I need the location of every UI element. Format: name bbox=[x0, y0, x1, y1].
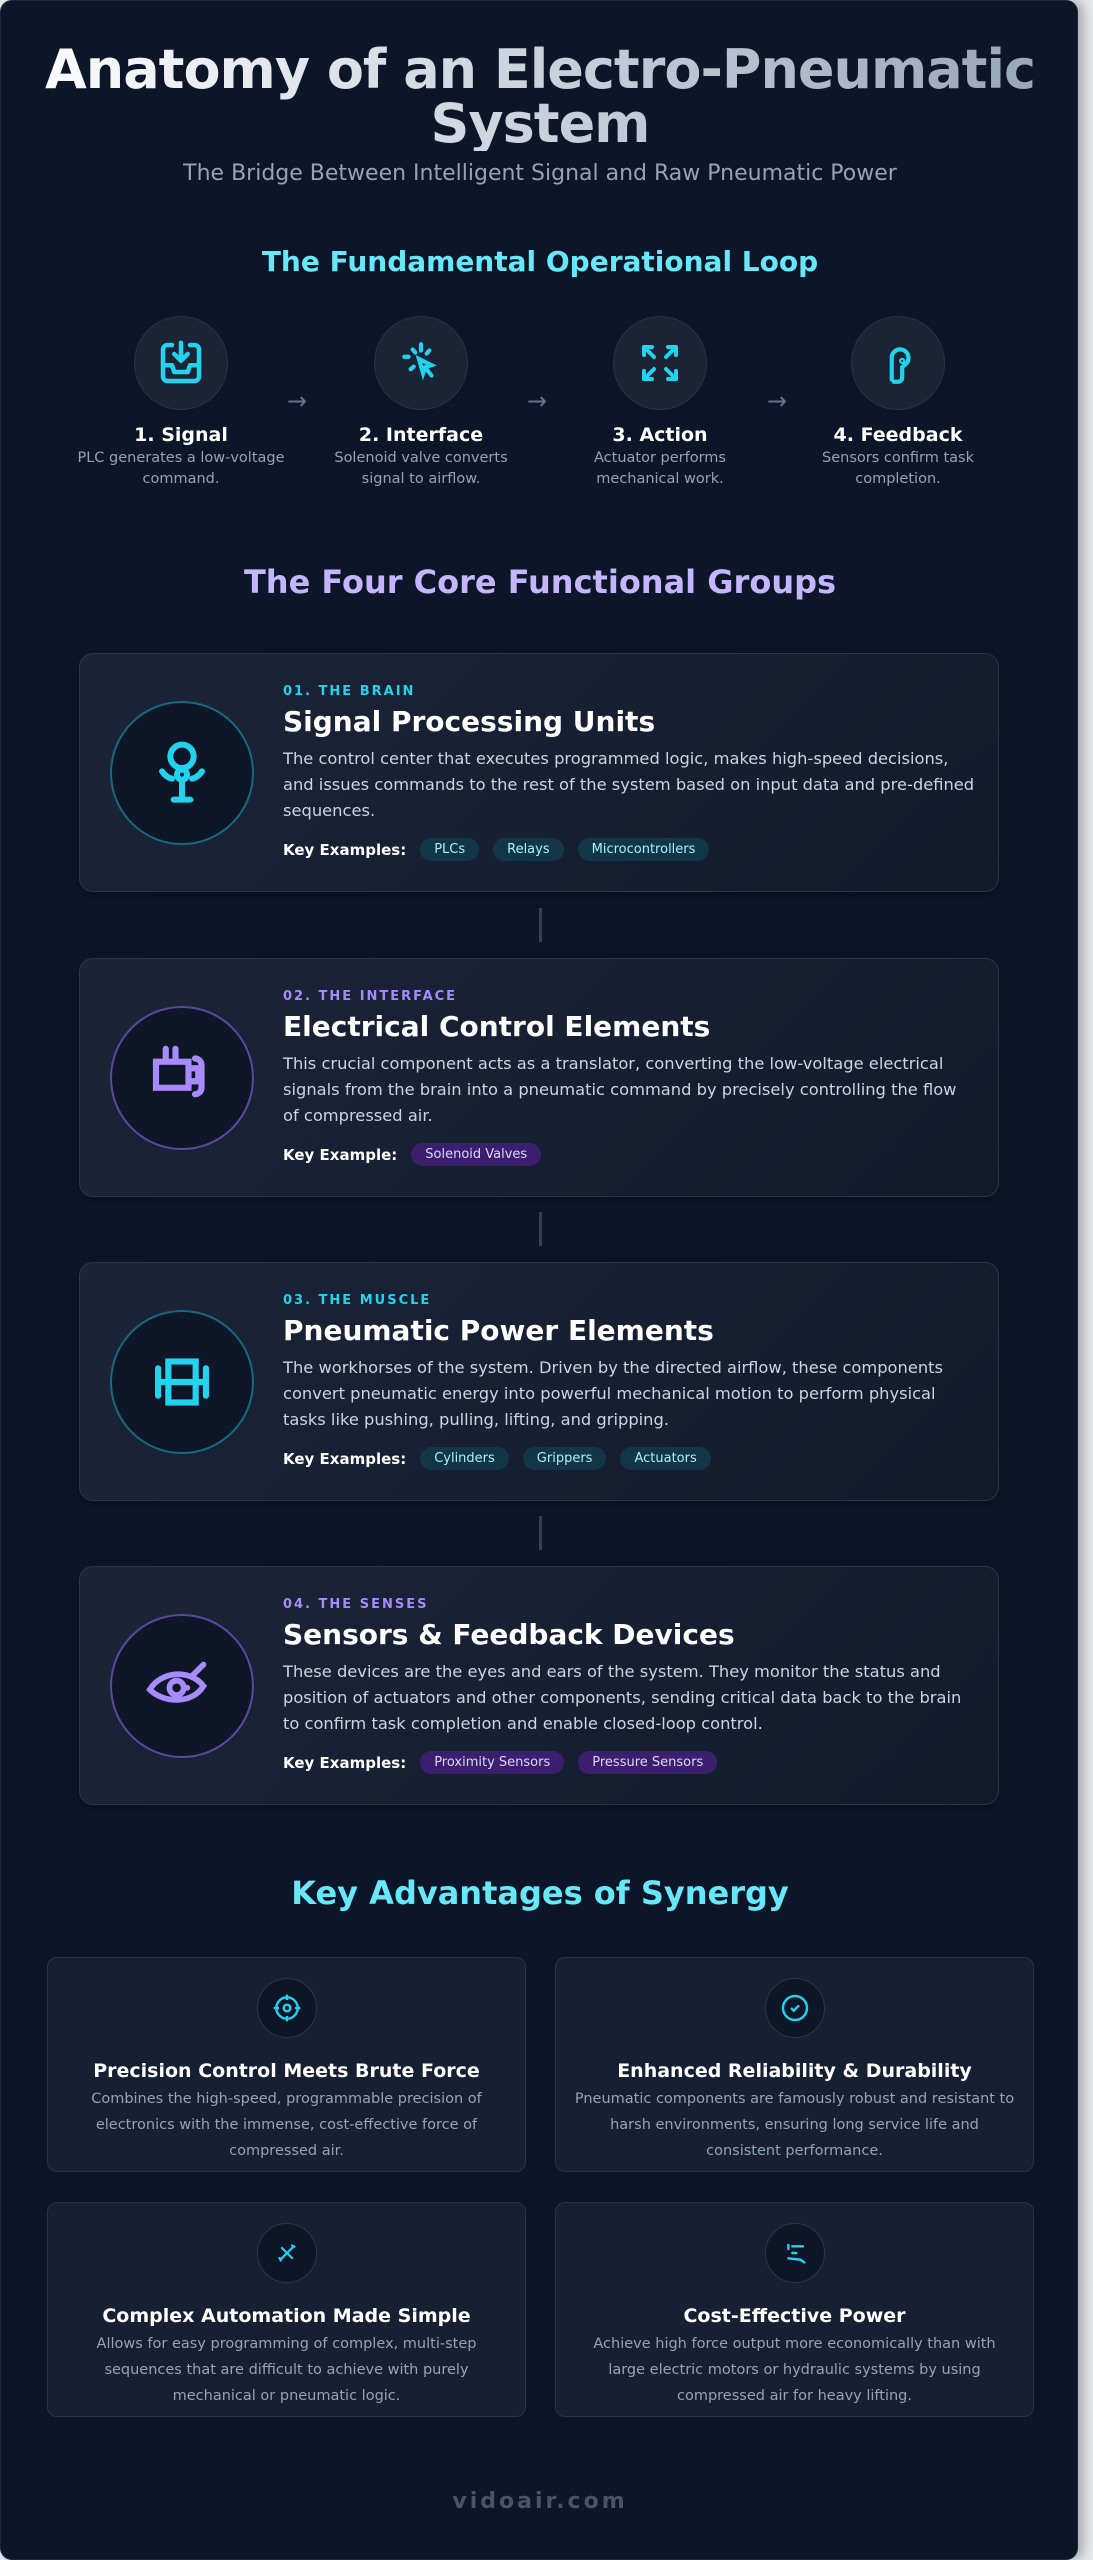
icon: automation bbox=[256, 2223, 316, 2283]
step 4 feedback: Sensors confirm task completion. bbox=[822, 450, 974, 487]
card 2: interface: Electrical Control Elements bbox=[283, 1010, 710, 1043]
card 4: senses: Key Examples: bbox=[283, 1754, 406, 1772]
title: Anatomy of an Electro-Pneumatic bbox=[45, 38, 1035, 101]
step 2 interface: Solenoid valve converts signal to airflow. bbox=[334, 450, 508, 487]
icon: ear bbox=[851, 316, 945, 410]
subtitle: The Bridge Between Intelligent Signal and Raw Pneumatic Power bbox=[183, 161, 897, 186]
icon: cylinder bbox=[110, 1310, 254, 1454]
icon: check bbox=[764, 1978, 824, 2038]
card 3: muscle: 03. THE MUSCLE bbox=[283, 1293, 431, 1308]
advantage 2: Enhanced Reliability & Durability bbox=[617, 2060, 972, 2082]
advantage 3: Complex Automation Made Simple bbox=[102, 2305, 471, 2327]
icon: valve bbox=[110, 1006, 254, 1150]
icon: target bbox=[256, 1978, 316, 2038]
card 1: brain: and issues commands to the rest of the system based on input data and pre-defined bbox=[283, 775, 974, 794]
advantage 1: Combines the high-speed, programmable precision of electronics with the immense, cost-effective force of compressed air. bbox=[91, 2091, 482, 2159]
step 2 interface: 2. Interface bbox=[359, 424, 483, 446]
card 2: interface bbox=[79, 958, 999, 1197]
advantage 2 bbox=[555, 1957, 1034, 2172]
card 1: brain: sequences. bbox=[283, 801, 375, 820]
icon: lift bbox=[764, 2223, 824, 2283]
advantage 1 bbox=[47, 1957, 526, 2172]
card 3: muscle: Grippers bbox=[537, 1451, 592, 1466]
card 2: interface: This crucial component acts as a translator, converting the low-voltage electrical bbox=[283, 1054, 943, 1073]
card 2: interface: Key Example: bbox=[283, 1146, 397, 1164]
card 4: senses: 04. THE SENSES bbox=[283, 1597, 428, 1612]
icon: inbox bbox=[134, 316, 228, 410]
heading: four core groups: The Four Core Functional Groups bbox=[244, 563, 836, 601]
heading: key advantages: Key Advantages of Synergy bbox=[291, 1874, 789, 1912]
card 4: senses: to confirm task completion and enable closed-loop control. bbox=[283, 1714, 763, 1733]
step 3 action bbox=[594, 316, 726, 487]
card 3: muscle: Pneumatic Power Elements bbox=[283, 1314, 714, 1347]
step 3 action: 3. Action bbox=[612, 424, 708, 446]
advantage 4: Cost-Effective Power bbox=[683, 2305, 906, 2327]
card 4: senses: Pressure Sensors bbox=[592, 1755, 703, 1770]
step 3 action: Actuator performs mechanical work. bbox=[594, 450, 726, 487]
card 3: muscle: convert pneumatic energy into powerful mechanical motion to perform physical bbox=[283, 1384, 936, 1403]
card 1: brain: Key Examples: bbox=[283, 840, 406, 858]
heading: operational loop: The Fundamental Operational Loop bbox=[262, 245, 818, 278]
card 2: interface: 02. THE INTERFACE bbox=[283, 989, 457, 1004]
step 4 feedback: 4. Feedback bbox=[834, 424, 962, 446]
card 1: brain: Relays bbox=[507, 842, 550, 857]
icon: brain bbox=[110, 701, 254, 845]
card 3: muscle: Actuators bbox=[634, 1451, 697, 1466]
card 1: brain bbox=[79, 653, 999, 892]
icon: expand bbox=[613, 316, 707, 410]
icon: click bbox=[374, 316, 468, 410]
card 4: senses: position of actuators and other components, sending critical data back to the brain bbox=[283, 1688, 961, 1707]
card 3: muscle: The workhorses of the system. Driven by the directed airflow, these components bbox=[283, 1358, 943, 1377]
advantage 1: Precision Control Meets Brute Force bbox=[93, 2060, 480, 2082]
card 4: senses bbox=[79, 1566, 999, 1805]
step 1 signal bbox=[77, 316, 285, 487]
step 1 signal: 1. Signal bbox=[134, 424, 228, 446]
advantage 4 bbox=[555, 2202, 1034, 2417]
title bbox=[1, 43, 1079, 151]
advantage 3 bbox=[47, 2202, 526, 2417]
arrow 1: → bbox=[287, 387, 307, 415]
card 4: senses: Sensors & Feedback Devices bbox=[283, 1618, 735, 1651]
advantage 3: Allows for easy programming of complex, multi-step sequences that are difficult to achieve with purely mechanical or pneumatic logic. bbox=[97, 2336, 476, 2404]
card 2: interface: of compressed air. bbox=[283, 1106, 433, 1125]
card 2: interface: signals from the brain into a pneumatic command by precisely controlling the flow bbox=[283, 1080, 956, 1099]
card 1: brain: The control center that executes programmed logic, makes high-speed decisions, bbox=[283, 749, 948, 768]
card 3: muscle: tasks like pushing, pulling, lifting, and gripping. bbox=[283, 1410, 669, 1429]
card 1: brain: PLCs bbox=[434, 842, 465, 857]
advantage 4: Achieve high force output more economically than with large electric motors or hydraulic systems by using compressed air for heavy lifting. bbox=[593, 2336, 996, 2404]
advantage 2: Pneumatic components are famously robust and resistant to harsh environments, ensuring long service life and consistent performance. bbox=[575, 2091, 1014, 2159]
footer: vidoair.com bbox=[452, 2489, 628, 2514]
card 3: muscle: Key Examples: bbox=[283, 1450, 406, 1468]
title: System bbox=[431, 92, 649, 155]
card 1: brain: Microcontrollers bbox=[592, 842, 695, 857]
icon: eye bbox=[110, 1614, 254, 1758]
step 4 feedback bbox=[822, 316, 974, 487]
card 3: muscle: Cylinders bbox=[434, 1451, 495, 1466]
card 3: muscle bbox=[79, 1262, 999, 1501]
arrow 3: → bbox=[767, 387, 787, 415]
card 2: interface: Solenoid Valves bbox=[425, 1147, 527, 1162]
card 1: brain: Signal Processing Units bbox=[283, 705, 655, 738]
step 2 interface bbox=[334, 316, 508, 487]
arrow 2: → bbox=[527, 387, 547, 415]
step 1 signal: PLC generates a low‑voltage command. bbox=[77, 450, 285, 487]
card 4: senses: These devices are the eyes and ears of the system. They monitor the status and bbox=[283, 1662, 941, 1681]
card 4: senses: Proximity Sensors bbox=[434, 1755, 550, 1770]
card 1: brain: 01. THE BRAIN bbox=[283, 684, 415, 699]
